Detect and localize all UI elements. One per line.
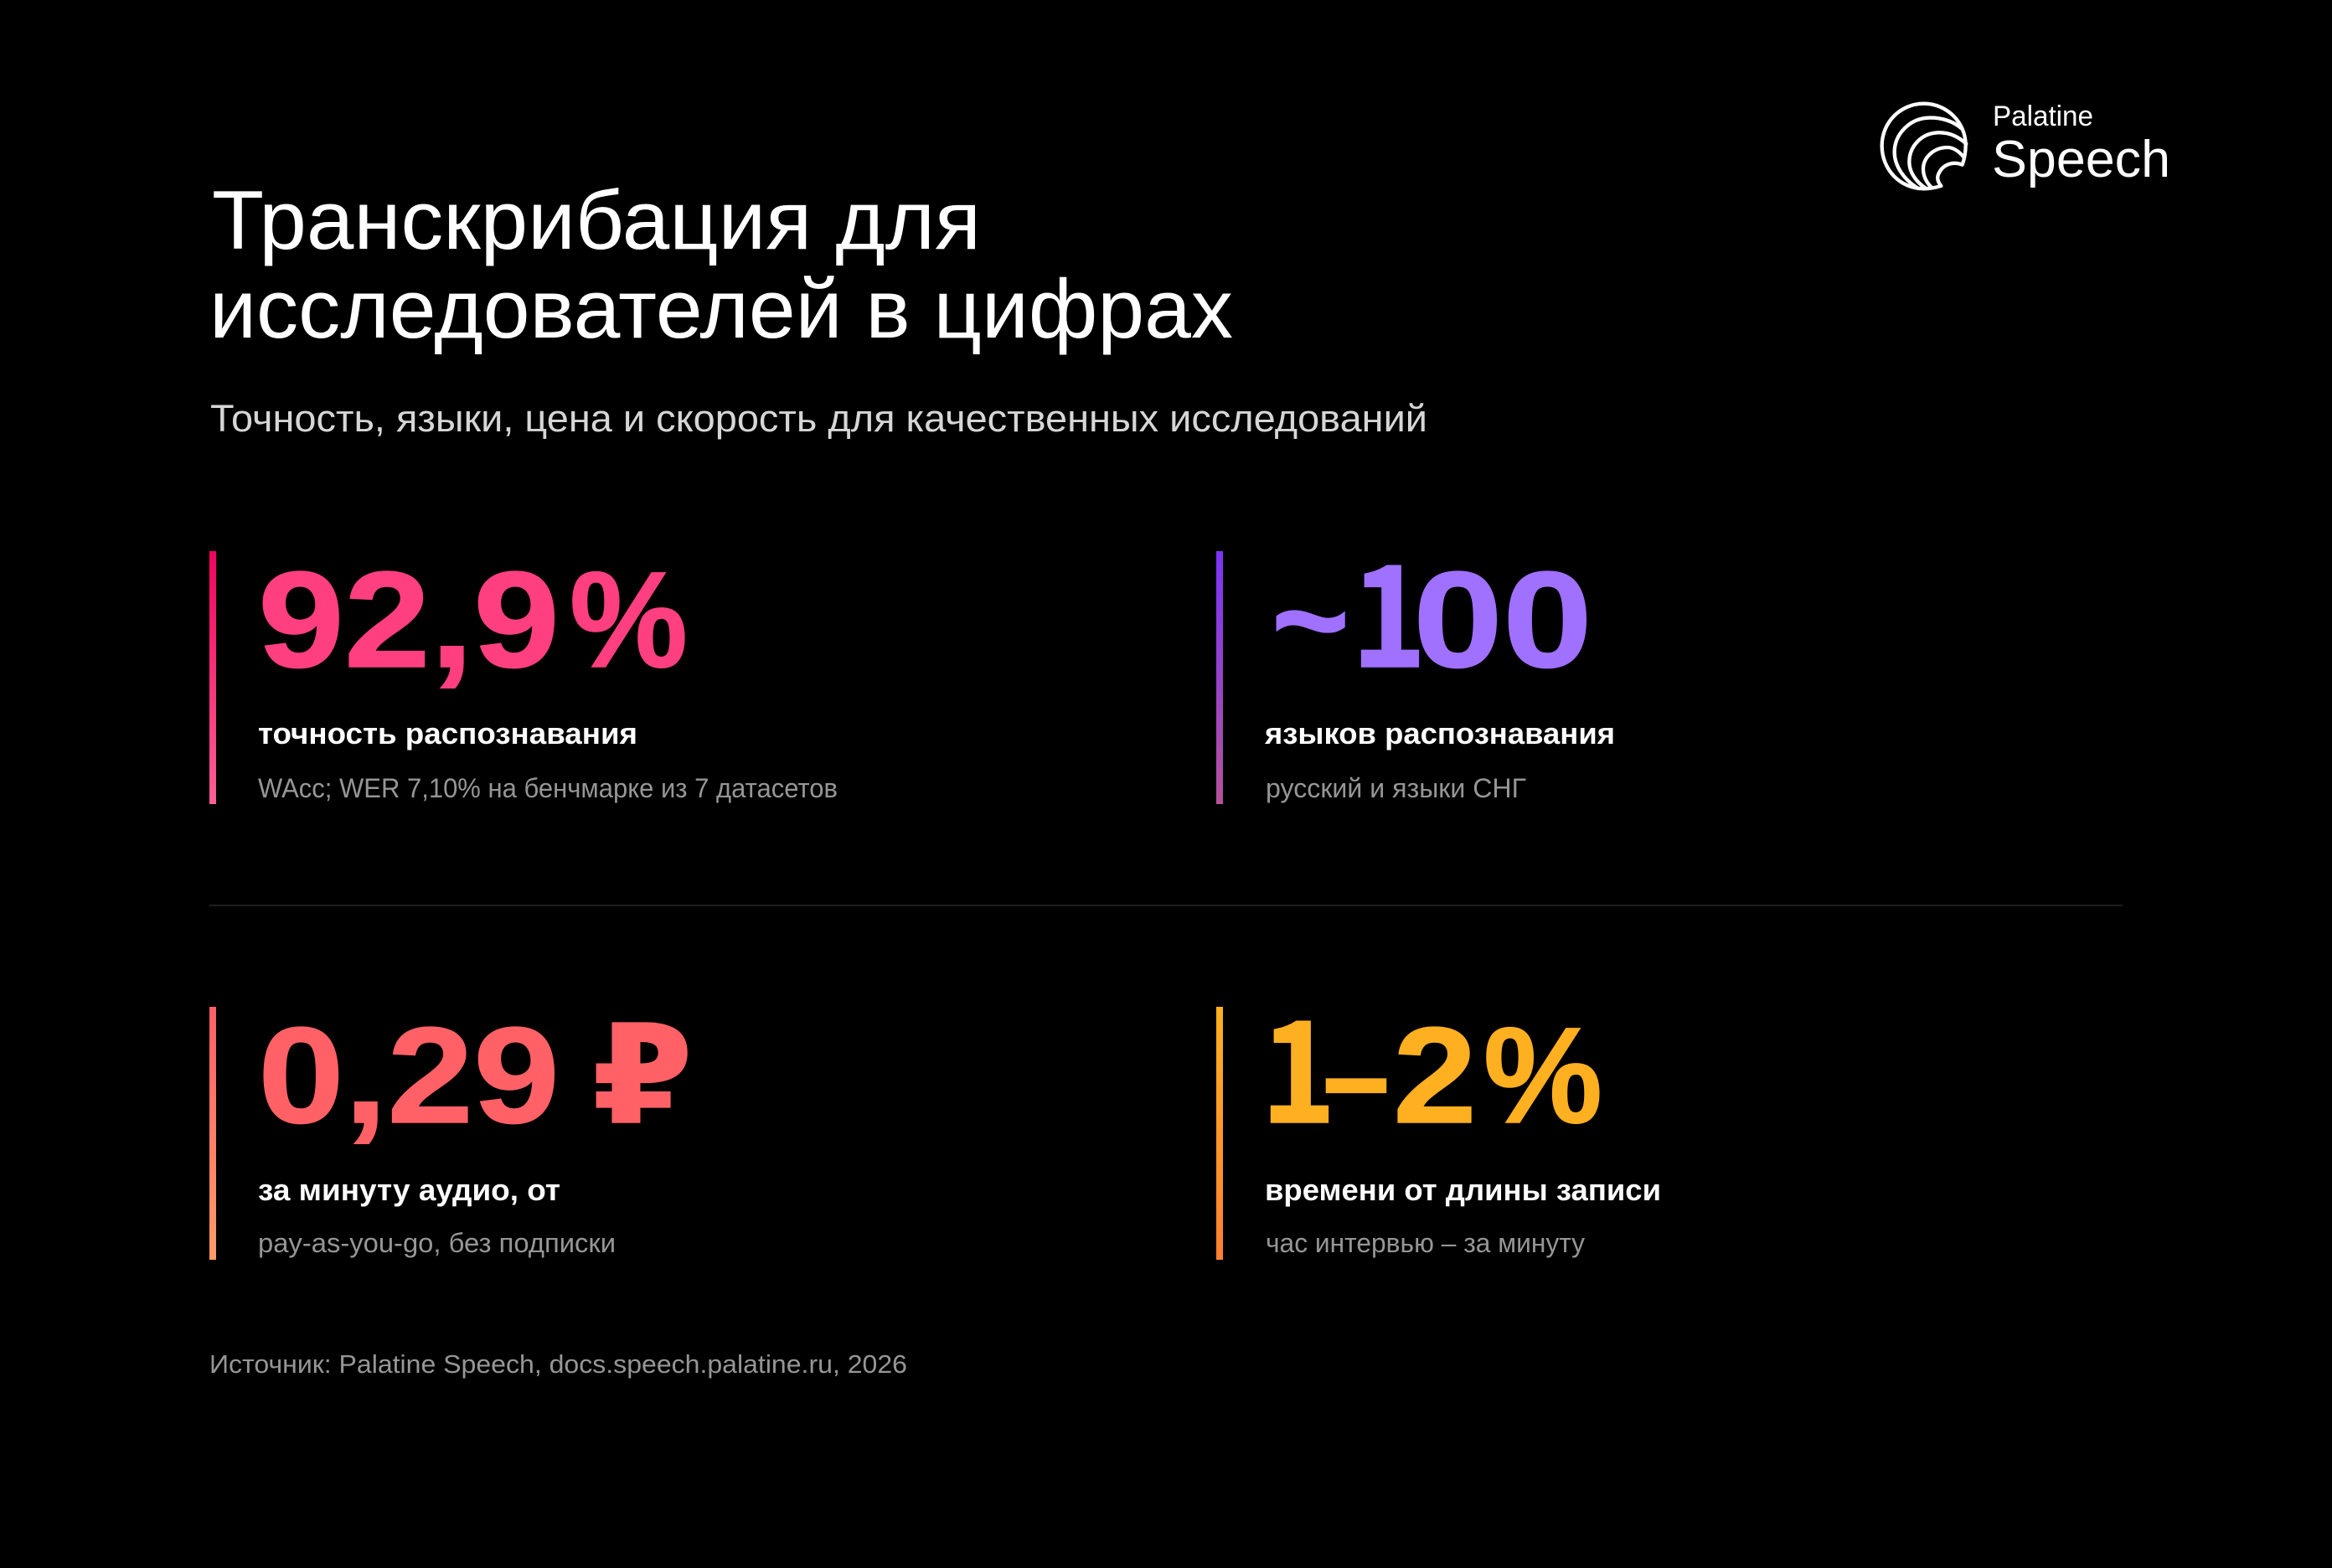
- panel: languages: [1216, 508, 1615, 804]
- note: pay-as-you-go, без подписки: [258, 1228, 616, 1258]
- note: WAcc; WER 7,10% на бенчмарке из 7 датасетов: [258, 773, 838, 803]
- accent bar: [1216, 1007, 1223, 1260]
- big number: 1: [1351, 508, 1427, 706]
- big number: %: [570, 543, 688, 696]
- logo word: Speech: Speech: [1992, 131, 2170, 188]
- big number: 1: [1261, 964, 1336, 1162]
- note: русский и языки СНГ: [1266, 773, 1526, 803]
- note: час интервью – за минуту: [1266, 1228, 1585, 1258]
- accent bar: [209, 551, 216, 804]
- big number: ~: [1272, 543, 1349, 696]
- title: [209, 173, 1233, 355]
- big number: 00: [1413, 543, 1592, 696]
- big number: –: [1323, 998, 1390, 1152]
- icon: concentric wave circle: [1882, 104, 1966, 188]
- title: Транскрибация для: [212, 173, 981, 266]
- big number: 2: [1393, 998, 1477, 1152]
- big number: %: [1483, 998, 1602, 1152]
- divider: [209, 905, 2123, 906]
- big number: ₽: [592, 998, 693, 1152]
- source: Источник: Palatine Speech, docs.speech.palatine.ru, 2026: [209, 1349, 907, 1379]
- accent bar: [1216, 551, 1223, 804]
- panel: accuracy: [209, 543, 838, 804]
- panel: speed: [1216, 964, 1661, 1260]
- title: исследователей в цифрах: [209, 262, 1233, 355]
- label: времени от длины записи: [1265, 1173, 1661, 1207]
- panel: price: [209, 998, 693, 1260]
- accent bar: [209, 1007, 216, 1260]
- label: точность распознавания: [258, 716, 637, 750]
- logo: Palatine Speech: [1882, 101, 2170, 188]
- label: языков распознавания: [1264, 716, 1615, 750]
- logo word: Palatine: Palatine: [1993, 101, 2093, 132]
- big number: 0,29: [258, 998, 560, 1152]
- subtitle: Точность, языки, цена и скорость для качественных исследований: [210, 397, 1427, 440]
- big number: 92,9: [258, 543, 560, 696]
- label: за минуту аудио, от: [258, 1173, 560, 1207]
